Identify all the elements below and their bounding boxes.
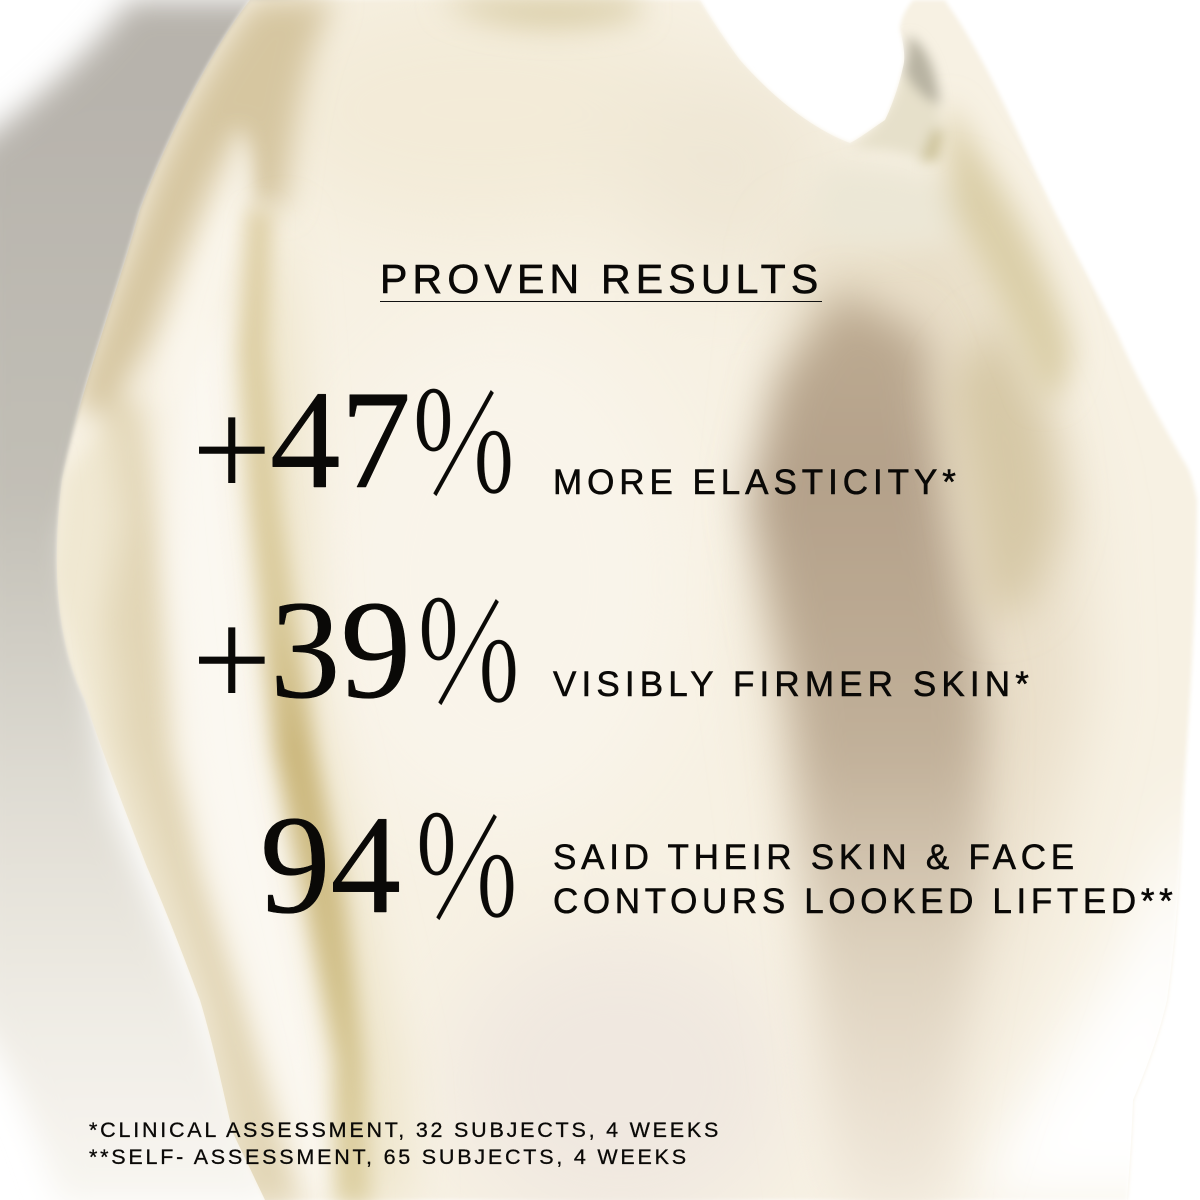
- left edge pale band: [58, 436, 190, 974]
- stat number: 94%: %: [414, 755, 518, 957]
- cast shadow: [0, 0, 300, 1200]
- white stripe and highlight: [168, 300, 340, 1200]
- stat label: said their skin and face contours looked lifted: CONTOURS LOOKED LIFTED**: [553, 882, 1177, 921]
- stat number: 94%: [260, 755, 518, 957]
- footnotes: **SELF- ASSESSMENT, 65 SUBJECTS, 4 WEEKS: [89, 1145, 689, 1169]
- stat number: +39%: [192, 541, 520, 743]
- pale tan shoulder right of hollow: [750, 234, 1097, 990]
- footnotes: [89, 1118, 721, 1169]
- stat number: +39%: %: [416, 541, 520, 743]
- heading: proven results: PROVEN RESULTS: [380, 256, 823, 302]
- right ridge: [945, 100, 1071, 400]
- stat number: +47%: [192, 331, 515, 533]
- stat label: said their skin and face contours looked lifted: SAID THEIR SKIN & FACE: [553, 838, 1079, 877]
- peak hook: [850, 35, 944, 162]
- brown hollow: [750, 290, 985, 1200]
- pale plateau: [810, 164, 955, 248]
- stat label: visibly firmer skin: VISIBLY FIRMER SKIN*: [553, 665, 1034, 704]
- stat label: said their skin and face contours looked lifted: [553, 838, 1177, 921]
- soft fade of right-hand edge: [976, 838, 1179, 1200]
- stat row: 39 percent visibly firmer skin: [192, 541, 1034, 743]
- stat number: +39%: +: [192, 582, 272, 738]
- stat number: +47%: 47: [270, 362, 411, 518]
- stat row: 94 percent said lifted: [260, 755, 1177, 957]
- stat number: +39%: 39: [270, 572, 411, 728]
- stat number: +47%: %: [412, 331, 515, 533]
- tan fold down left side: [75, 0, 335, 1200]
- footnotes: *CLINICAL ASSESSMENT, 32 SUBJECTS, 4 WEEKS: [89, 1118, 721, 1142]
- stat row: 47 percent more elasticity: [192, 331, 961, 533]
- stat number: 94%: 94: [260, 787, 401, 943]
- yellow streak: [268, 266, 416, 1200]
- top crease: [440, 0, 640, 26]
- stat number: +47%: +: [192, 372, 272, 528]
- stat label: more elasticity: MORE ELASTICITY*: [553, 463, 961, 502]
